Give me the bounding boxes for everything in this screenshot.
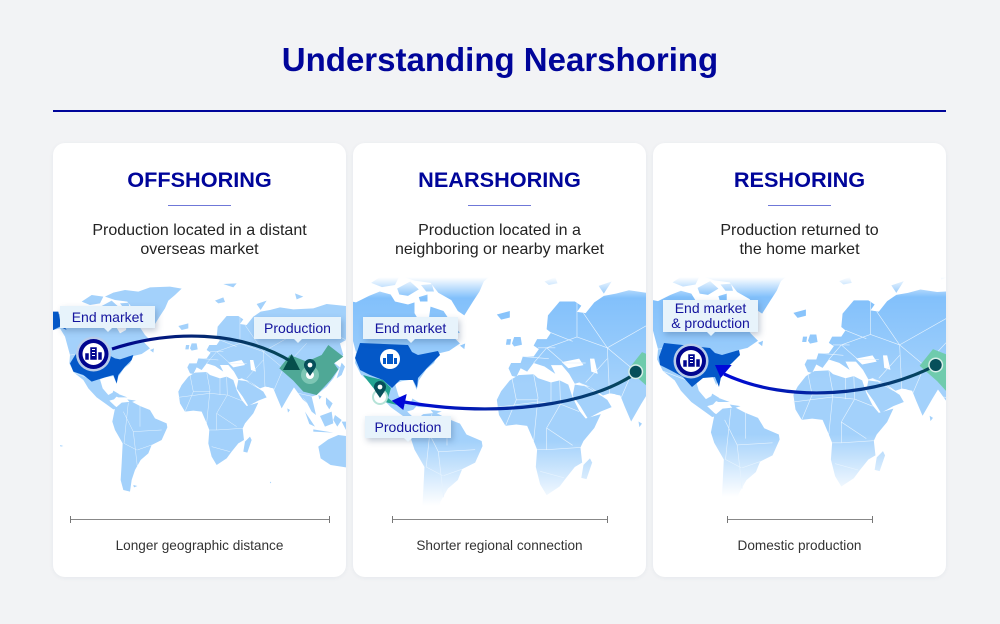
distance bar [727,516,873,523]
arrow: route arc [724,365,936,393]
heading: reshoring: RESHORING [734,167,865,192]
description: reshoring: the home market [739,241,860,258]
label: production: Production [264,320,331,336]
icon: production pin [373,381,387,404]
caption: Shorter regional connection [416,538,583,553]
label: end market [60,306,155,328]
panel: reshoring [653,143,946,577]
panel: offshoring [53,143,346,577]
label: end market [363,317,458,339]
description: nearshoring: Production located in a [418,222,581,239]
icon: origin dot [628,364,643,379]
map: reshoring route [653,278,946,492]
usa [659,343,740,387]
icon: end market building [76,336,111,372]
label: end market and production: End market [675,300,746,316]
label: production [254,317,341,339]
arrow: route arc [404,373,636,409]
icon: production pin [301,359,319,384]
icon: end market building [674,344,708,378]
label: production [365,416,451,438]
usa [355,343,440,388]
map: offshoring route [53,283,346,492]
title: Understanding Nearshoring [282,41,718,78]
description: nearshoring [395,222,604,258]
heading: nearshoring: NEARSHORING [418,167,581,192]
description: offshoring: overseas market [140,241,259,258]
icon: end market building [380,349,400,369]
description: nearshoring: neighboring or nearby market [395,241,604,258]
label: end market: End market [72,309,143,325]
icon: arrowhead [715,365,732,378]
icon: origin dot [928,358,943,372]
distance bar [70,516,330,523]
description: reshoring [720,222,879,258]
heading: offshoring: OFFSHORING [127,167,272,192]
label: production: Production [375,419,441,435]
label: end market and production: & production [671,315,750,331]
arrow: route arc [112,336,292,362]
description: reshoring: Production returned to [720,222,879,239]
caption: Longer geographic distance [116,538,283,553]
caption: Domestic production [738,538,861,553]
mexico [363,375,397,405]
panel: nearshoring [353,143,646,577]
description: offshoring: Production located in a distant [92,222,307,239]
map: nearshoring route [353,278,646,500]
icon: arrowhead [392,394,407,410]
label: end market: End market [375,320,446,336]
description: offshoring [92,222,307,258]
label: end market and production [663,300,758,332]
icon: triangle arrowhead [283,354,300,370]
distance bar [392,516,608,523]
